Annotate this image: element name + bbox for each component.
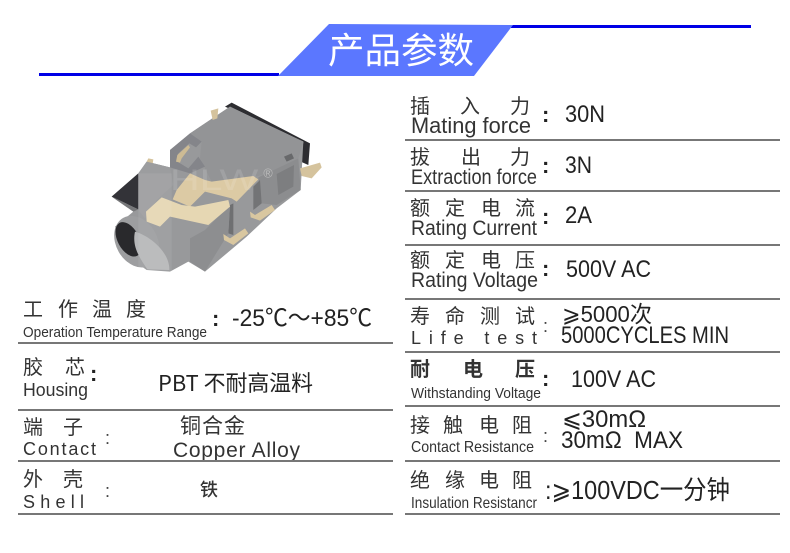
row: contact: Copper Alloy (173, 439, 300, 462)
row: operation temperature: -25℃〜+85℃ (232, 305, 372, 332)
row: extraction force: 3N (565, 152, 592, 179)
product photo: audio jack connector (105, 103, 322, 276)
row: withstanding voltage: 100V AC (571, 366, 656, 393)
row: rating voltage: : (542, 256, 549, 281)
panel: left parameter table (18, 293, 393, 515)
row: rating voltage: 500V AC (566, 256, 651, 283)
row: mating force (405, 90, 780, 141)
row: insulation resistance: 绝缘电阻 (410, 464, 532, 493)
row: contact: : (105, 428, 110, 448)
row: shell: 外壳 (23, 463, 83, 492)
row: life test: 5000CYCLES MIN (561, 322, 729, 349)
row: operation temperature: : (212, 306, 219, 331)
row: rating current: 2A (565, 202, 592, 229)
row: operation temperature (18, 293, 393, 344)
title banner (39, 22, 751, 76)
row: contact resistance: 30mΩ MAX (561, 427, 683, 454)
icon: gold contact upper (173, 173, 258, 207)
row: rating current (405, 192, 780, 246)
product photo: audio jack connector: ® (263, 166, 273, 180)
icon: gold foot pins (223, 205, 275, 245)
row: life test: ⩾5000次 (562, 301, 652, 327)
row: extraction force: Extraction force (411, 166, 537, 189)
row: contact resistance (405, 406, 780, 462)
row: rating current: Rating Current (411, 217, 537, 240)
row: life test: 寿命测试 (410, 300, 535, 329)
row: housing (18, 351, 393, 411)
row: contact: Contact (23, 439, 96, 459)
row: housing: : (90, 361, 97, 386)
row: shell: : (105, 481, 110, 501)
row: rating current: : (542, 204, 549, 229)
row: withstanding voltage: : (542, 366, 549, 391)
row: mating force: Mating force (411, 113, 531, 138)
row: housing: PBT 不耐高温料 (158, 366, 313, 398)
row: life test: : (543, 316, 548, 336)
row: shell: 铁 (200, 476, 218, 502)
row: withstanding voltage (405, 353, 780, 407)
row: insulation resistance: Insulation Resistancr (411, 495, 538, 512)
row: insulation resistance: :⩾100VDC一分钟 (545, 475, 730, 505)
row: operation temperature: Operation Temperature Range (23, 324, 207, 341)
row: contact resistance: ⩽30mΩ (562, 406, 646, 433)
row: housing: 胶芯 (23, 351, 85, 380)
row: rating voltage: 额定电压 (410, 244, 535, 273)
row: mating force: 30N (565, 101, 605, 128)
row: rating voltage: Rating Voltage (411, 269, 538, 292)
row: withstanding voltage: Withstanding Voltage (411, 385, 541, 402)
row: operation temperature: 工作温度 (23, 293, 146, 322)
row: life test (405, 300, 780, 353)
icon: gold contact lower (146, 197, 230, 227)
row: rating voltage (405, 244, 780, 300)
row: extraction force (405, 141, 780, 192)
row: rating current: 额定电流 (410, 192, 535, 221)
row: mating force: : (542, 102, 549, 127)
panel: right parameter table (405, 90, 780, 515)
row: extraction force: : (542, 153, 549, 178)
title text: 产品参数 (328, 22, 474, 74)
row: life test: Life test (411, 328, 537, 348)
row: insulation resistance (405, 464, 780, 515)
row: contact: 铜合金 (180, 410, 245, 440)
row: withstanding voltage: 耐电压 (410, 353, 535, 382)
row: mating force: 插入力 (410, 90, 530, 119)
row: contact resistance: : (543, 426, 548, 446)
row: extraction force: 拔出力 (410, 141, 530, 170)
row: shell (18, 463, 393, 515)
row: contact resistance: 接触电阻 (410, 409, 532, 438)
row: contact (18, 410, 393, 462)
row: shell: Shell (23, 492, 84, 512)
watermark: HLW (170, 164, 259, 197)
row: contact resistance: Contact Resistance (411, 439, 534, 456)
row: housing: Housing (23, 380, 88, 400)
row: contact: 端子 (23, 411, 83, 440)
